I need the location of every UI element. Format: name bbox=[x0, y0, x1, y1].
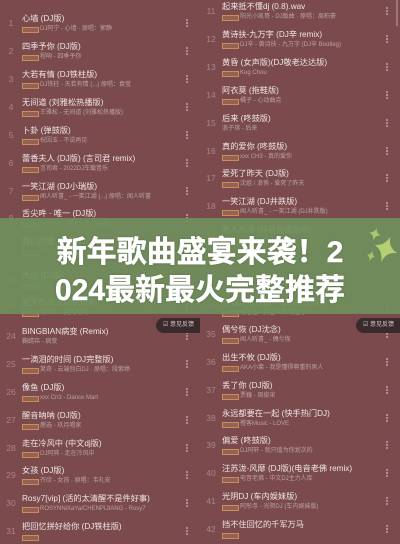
song row 27: 27 bbox=[6, 415, 16, 425]
song row 2: 程响 - 四季予你 bbox=[40, 54, 81, 60]
song row 29: 女孩 (DJ版) bbox=[22, 466, 64, 475]
song row 3: 大若有情 (DJ铁柱版) bbox=[22, 70, 97, 79]
song row 35 bbox=[206, 325, 388, 344]
song row 34: 34 bbox=[206, 302, 216, 312]
feedback button right bbox=[356, 318, 400, 333]
song row 42: 42 bbox=[206, 524, 216, 534]
song row 41: 41 bbox=[206, 496, 216, 506]
song row 25: 笑奇 - 云端别白DJ · 原唱：段紫婷 bbox=[40, 367, 130, 373]
song row 7: 7 bbox=[9, 186, 13, 196]
song row 27 bbox=[6, 411, 188, 430]
song row 3: DJ铁柱 - 天若有情 (...) 原唱：袁莹 bbox=[40, 82, 131, 88]
song row 2 bbox=[9, 42, 188, 61]
song row 13: Kug Chou bbox=[240, 70, 267, 76]
song row 41 bbox=[206, 492, 388, 511]
song row 12: 黄诗扶-九万字 (DJ辛 remix) bbox=[222, 30, 322, 39]
song row 29 bbox=[6, 466, 188, 485]
song row 19: 19 bbox=[206, 229, 216, 239]
song row 16 bbox=[206, 142, 388, 161]
song row 9: DCC - 我们的爱 bbox=[40, 249, 82, 255]
song row 9: 我们的爱 (DJ版) bbox=[22, 237, 81, 246]
song row 7: 一笑江湖 (DJ小瑞版) bbox=[22, 182, 97, 191]
song row 1: 心墙 (DJ版) bbox=[22, 14, 64, 23]
song row 24: 24 bbox=[6, 331, 16, 341]
song row 14: 橘子 - 心动曲克 bbox=[240, 98, 281, 104]
song row 26: 26 bbox=[6, 387, 16, 397]
title bbox=[55, 235, 345, 307]
song row 26: xxx Cn3 - Dance Mart bbox=[40, 395, 98, 401]
song row 6: 言司君 - 2022DJ车载音乐 bbox=[40, 166, 108, 172]
song row 4 bbox=[8, 98, 188, 117]
song row 8 bbox=[9, 209, 188, 227]
song row 8: Siobhan - 唯一 · 21 (DJ版) bbox=[40, 221, 110, 227]
song row 40: 40 bbox=[206, 468, 216, 478]
title: 024最新最火完整推荐 bbox=[55, 274, 345, 307]
song row 14 bbox=[206, 86, 388, 105]
title banner bbox=[0, 218, 400, 314]
song row 5: 祝因玉 - 不说再见 bbox=[40, 138, 87, 144]
song row 26 bbox=[6, 383, 188, 402]
song row 35: 闻人听書_ - 偶兮恢 bbox=[240, 337, 291, 343]
song row 13: 黄昏 (女声版)(DJ敬老达达版) bbox=[222, 58, 327, 67]
song row 29: 29 bbox=[6, 470, 16, 480]
song row 29: 齐欣 - 女孩 · 原唱：韦礼安 bbox=[40, 478, 111, 484]
song row 28: 28 bbox=[6, 443, 16, 453]
song row 35: 35 bbox=[206, 329, 216, 339]
song row 5: 卜卦 (弹鼓版) bbox=[22, 126, 71, 135]
song row 15 bbox=[206, 114, 388, 132]
song row 24 bbox=[6, 327, 188, 345]
song row 3 bbox=[9, 70, 188, 89]
song row 24: 鞠婧祎 - 病变 bbox=[22, 339, 57, 345]
song row 9: 9 bbox=[9, 241, 13, 251]
song row 11 bbox=[207, 2, 388, 21]
song row 39: 39 bbox=[206, 440, 216, 450]
song row 15: 15 bbox=[206, 118, 216, 128]
song row 8: 8 bbox=[9, 213, 13, 223]
song row 2: 四季予你 (DJ版) bbox=[22, 42, 81, 51]
song row 8: 舌尖吽 · 唯一 (DJ版) bbox=[22, 209, 96, 218]
song row 34: 走着走着就散了 (DJ胡悦版) bbox=[222, 298, 322, 307]
song row 11: 阳光小凯哥 - DJ版曲 · 原唱：周柏豪 bbox=[240, 14, 336, 20]
song row 27: 鹿选 - 玖月唱家 bbox=[40, 423, 81, 429]
song row 27: 醒音呐呐 (DJ版) bbox=[22, 411, 81, 420]
song row 26: 像鱼 (DJ版) bbox=[22, 383, 64, 392]
song row 42: 挡不住回忆的千军万马 bbox=[222, 520, 304, 529]
song row 23: 23 bbox=[6, 302, 16, 312]
song row 19 bbox=[206, 225, 312, 243]
song row 38: 永远都要在一起 (快手热门DJ) bbox=[222, 409, 330, 418]
song row 5: 5 bbox=[9, 130, 13, 140]
song row 1: DJ阿宁 - 心墙 · 原唱：郭静 bbox=[40, 26, 112, 32]
song row 38 bbox=[206, 409, 388, 428]
song row 17: 沈姐 / 浪侑 - 爱死了昨天 bbox=[240, 181, 304, 187]
song row 15: 浪子琪 - 后来 bbox=[222, 126, 257, 132]
song row 6 bbox=[9, 154, 188, 173]
song row 7 bbox=[9, 182, 188, 201]
song row 17: 17 bbox=[206, 173, 216, 183]
song row 25 bbox=[6, 355, 188, 374]
song row 28: 走在冷风中 (中文dj版) bbox=[22, 439, 102, 448]
song row 15: 后来 (咚鼓版) bbox=[222, 114, 271, 123]
song row 40: 电音老佛 - 中文DJ主力人库 bbox=[240, 476, 313, 482]
song row 16: 16 bbox=[206, 146, 216, 156]
song row 13: 13 bbox=[206, 62, 216, 72]
song row 5 bbox=[9, 126, 188, 145]
feedback button left: ☑ 意见反馈 bbox=[163, 322, 194, 328]
song row 39: DJ阿轩 - 就只值为你划次的 bbox=[240, 448, 313, 454]
song row 30 bbox=[6, 494, 188, 513]
song row 23: 夏天的风 (DJ弹鼓版) bbox=[22, 298, 97, 307]
song row 13 bbox=[206, 58, 388, 77]
song row 38: 38 bbox=[206, 413, 216, 423]
song row 17 bbox=[206, 169, 388, 188]
song row 14: 阿衣莫 (拖鞋版) bbox=[222, 86, 279, 95]
title: 新年歌曲盛宴来袭！2 bbox=[57, 236, 343, 269]
song row 37 bbox=[206, 381, 388, 400]
song row 37: 丢了你 (DJ版) bbox=[222, 381, 272, 390]
song row 37: 37 bbox=[206, 385, 216, 395]
scrollbar bbox=[396, 0, 398, 26]
song row 3: 3 bbox=[9, 74, 13, 84]
song row 28: DJ阿宾 - 走在冷风中 bbox=[40, 451, 95, 457]
song row 30: ROSYNNiXaYa/CHENPIJIANG - Rosy7 bbox=[40, 506, 146, 512]
song row 22: 公子 - 大后 bbox=[40, 283, 69, 289]
song row 30: 30 bbox=[6, 498, 16, 508]
song row 18: 闻人听書_ - 一笑江湖 (DJ井跌版) bbox=[240, 209, 328, 215]
song row 12: DJ辛 - 黄诗扶 - 九万字 (DJ辛 Bootleg) bbox=[240, 42, 341, 48]
song row 1 bbox=[9, 14, 188, 33]
icon: sparkles bbox=[367, 228, 397, 262]
song row 23 bbox=[6, 298, 97, 317]
song row 19: 老人与海 (抖音热播原版) bbox=[222, 225, 312, 234]
song row 25: 一滴泪的时间 (DJ完整版) bbox=[22, 355, 113, 364]
song row 4: 4 bbox=[9, 102, 13, 112]
song row 35: 偶兮恢 (DJ沈念) bbox=[222, 325, 281, 334]
song row 9 bbox=[9, 237, 82, 255]
song row 4: 无间道 (刘雅松热播版) bbox=[22, 98, 103, 107]
song row 36: 36 bbox=[206, 357, 216, 367]
song row 22: 22 bbox=[6, 275, 16, 285]
song row 12 bbox=[206, 30, 388, 49]
song row 16: 真的爱你 (咚鼓版) bbox=[222, 142, 287, 151]
song row 18 bbox=[206, 197, 388, 216]
song row 39 bbox=[206, 436, 388, 455]
song row 23: 封面人 - 夏天的风 bbox=[40, 310, 87, 316]
song row 18: 一笑江湖 (DJ井跌版) bbox=[222, 197, 297, 206]
song row 22 bbox=[6, 271, 69, 289]
song row 12: 12 bbox=[206, 34, 216, 44]
song row 41: 光阴DJ (车内娱妹版) bbox=[222, 492, 297, 501]
song row 14: 14 bbox=[206, 90, 216, 100]
song row 18: 18 bbox=[206, 201, 216, 211]
song row 36: AKA小裴 - 我是懂得尊重的男人 bbox=[240, 365, 323, 371]
song row 41: 阿彤寺 - 光阴DJ (车内娱妹版) bbox=[240, 504, 318, 510]
song row 22: 大后 (DJ版) bbox=[22, 271, 64, 280]
song row 38: 橙客Music - LOVE bbox=[240, 421, 289, 427]
song row 34: 何洛洛 - 抖音DJ车载音乐 bbox=[240, 310, 307, 316]
song row 6: 6 bbox=[9, 158, 13, 168]
song row 11: 起来抵不懂dj (0.8).wav bbox=[222, 2, 305, 11]
song row 31 bbox=[6, 522, 188, 541]
song row 7: 闻人听書_ - 一笑江湖 (...) 原唱：闻人听書 bbox=[40, 194, 151, 200]
song row 42 bbox=[206, 520, 388, 539]
song row 40 bbox=[206, 464, 388, 483]
feedback button left bbox=[156, 318, 200, 333]
song row 30: Rosy7[vip] (活的太清醒不是件好事) bbox=[22, 494, 150, 503]
song row 11: 11 bbox=[207, 6, 215, 16]
song row 37: 贾巍 - 周俊宋 bbox=[240, 393, 275, 399]
song row 24: BINGBIAN病变 (Remix) bbox=[22, 327, 108, 336]
song row 39: 偏爱 (咚鼓版) bbox=[222, 436, 271, 445]
song row 31: 把回忆拼好给你 (DJ铁柱版) bbox=[22, 522, 122, 531]
song row 1: 1 bbox=[9, 18, 13, 28]
song row 36: 出生不攸 (DJ版) bbox=[222, 353, 281, 362]
song row 2: 2 bbox=[9, 46, 13, 56]
song row 28 bbox=[6, 439, 188, 458]
song row 34 bbox=[206, 298, 322, 317]
song row 4: 王雅松 - 无间道 (刘雅松热播版) bbox=[40, 110, 123, 116]
feedback button right: ☑ 意见反馈 bbox=[363, 322, 394, 328]
song row 31: 31 bbox=[6, 526, 16, 536]
song row 16: xxx CH3 - 真的爱你 bbox=[240, 154, 292, 160]
song row 6: 蕾香夫人 (DJ版) (言司君 remix) bbox=[22, 154, 135, 163]
song row 36 bbox=[206, 353, 388, 372]
song row 17: 爱死了昨天 (DJ版) bbox=[222, 169, 289, 178]
song row 40: 汪苏泷-风靡 (DJ版)(电音老佛 remix) bbox=[222, 464, 352, 473]
song row 25: 25 bbox=[6, 359, 16, 369]
song row 19: 海鸣威 - 老人与海 bbox=[240, 237, 287, 243]
